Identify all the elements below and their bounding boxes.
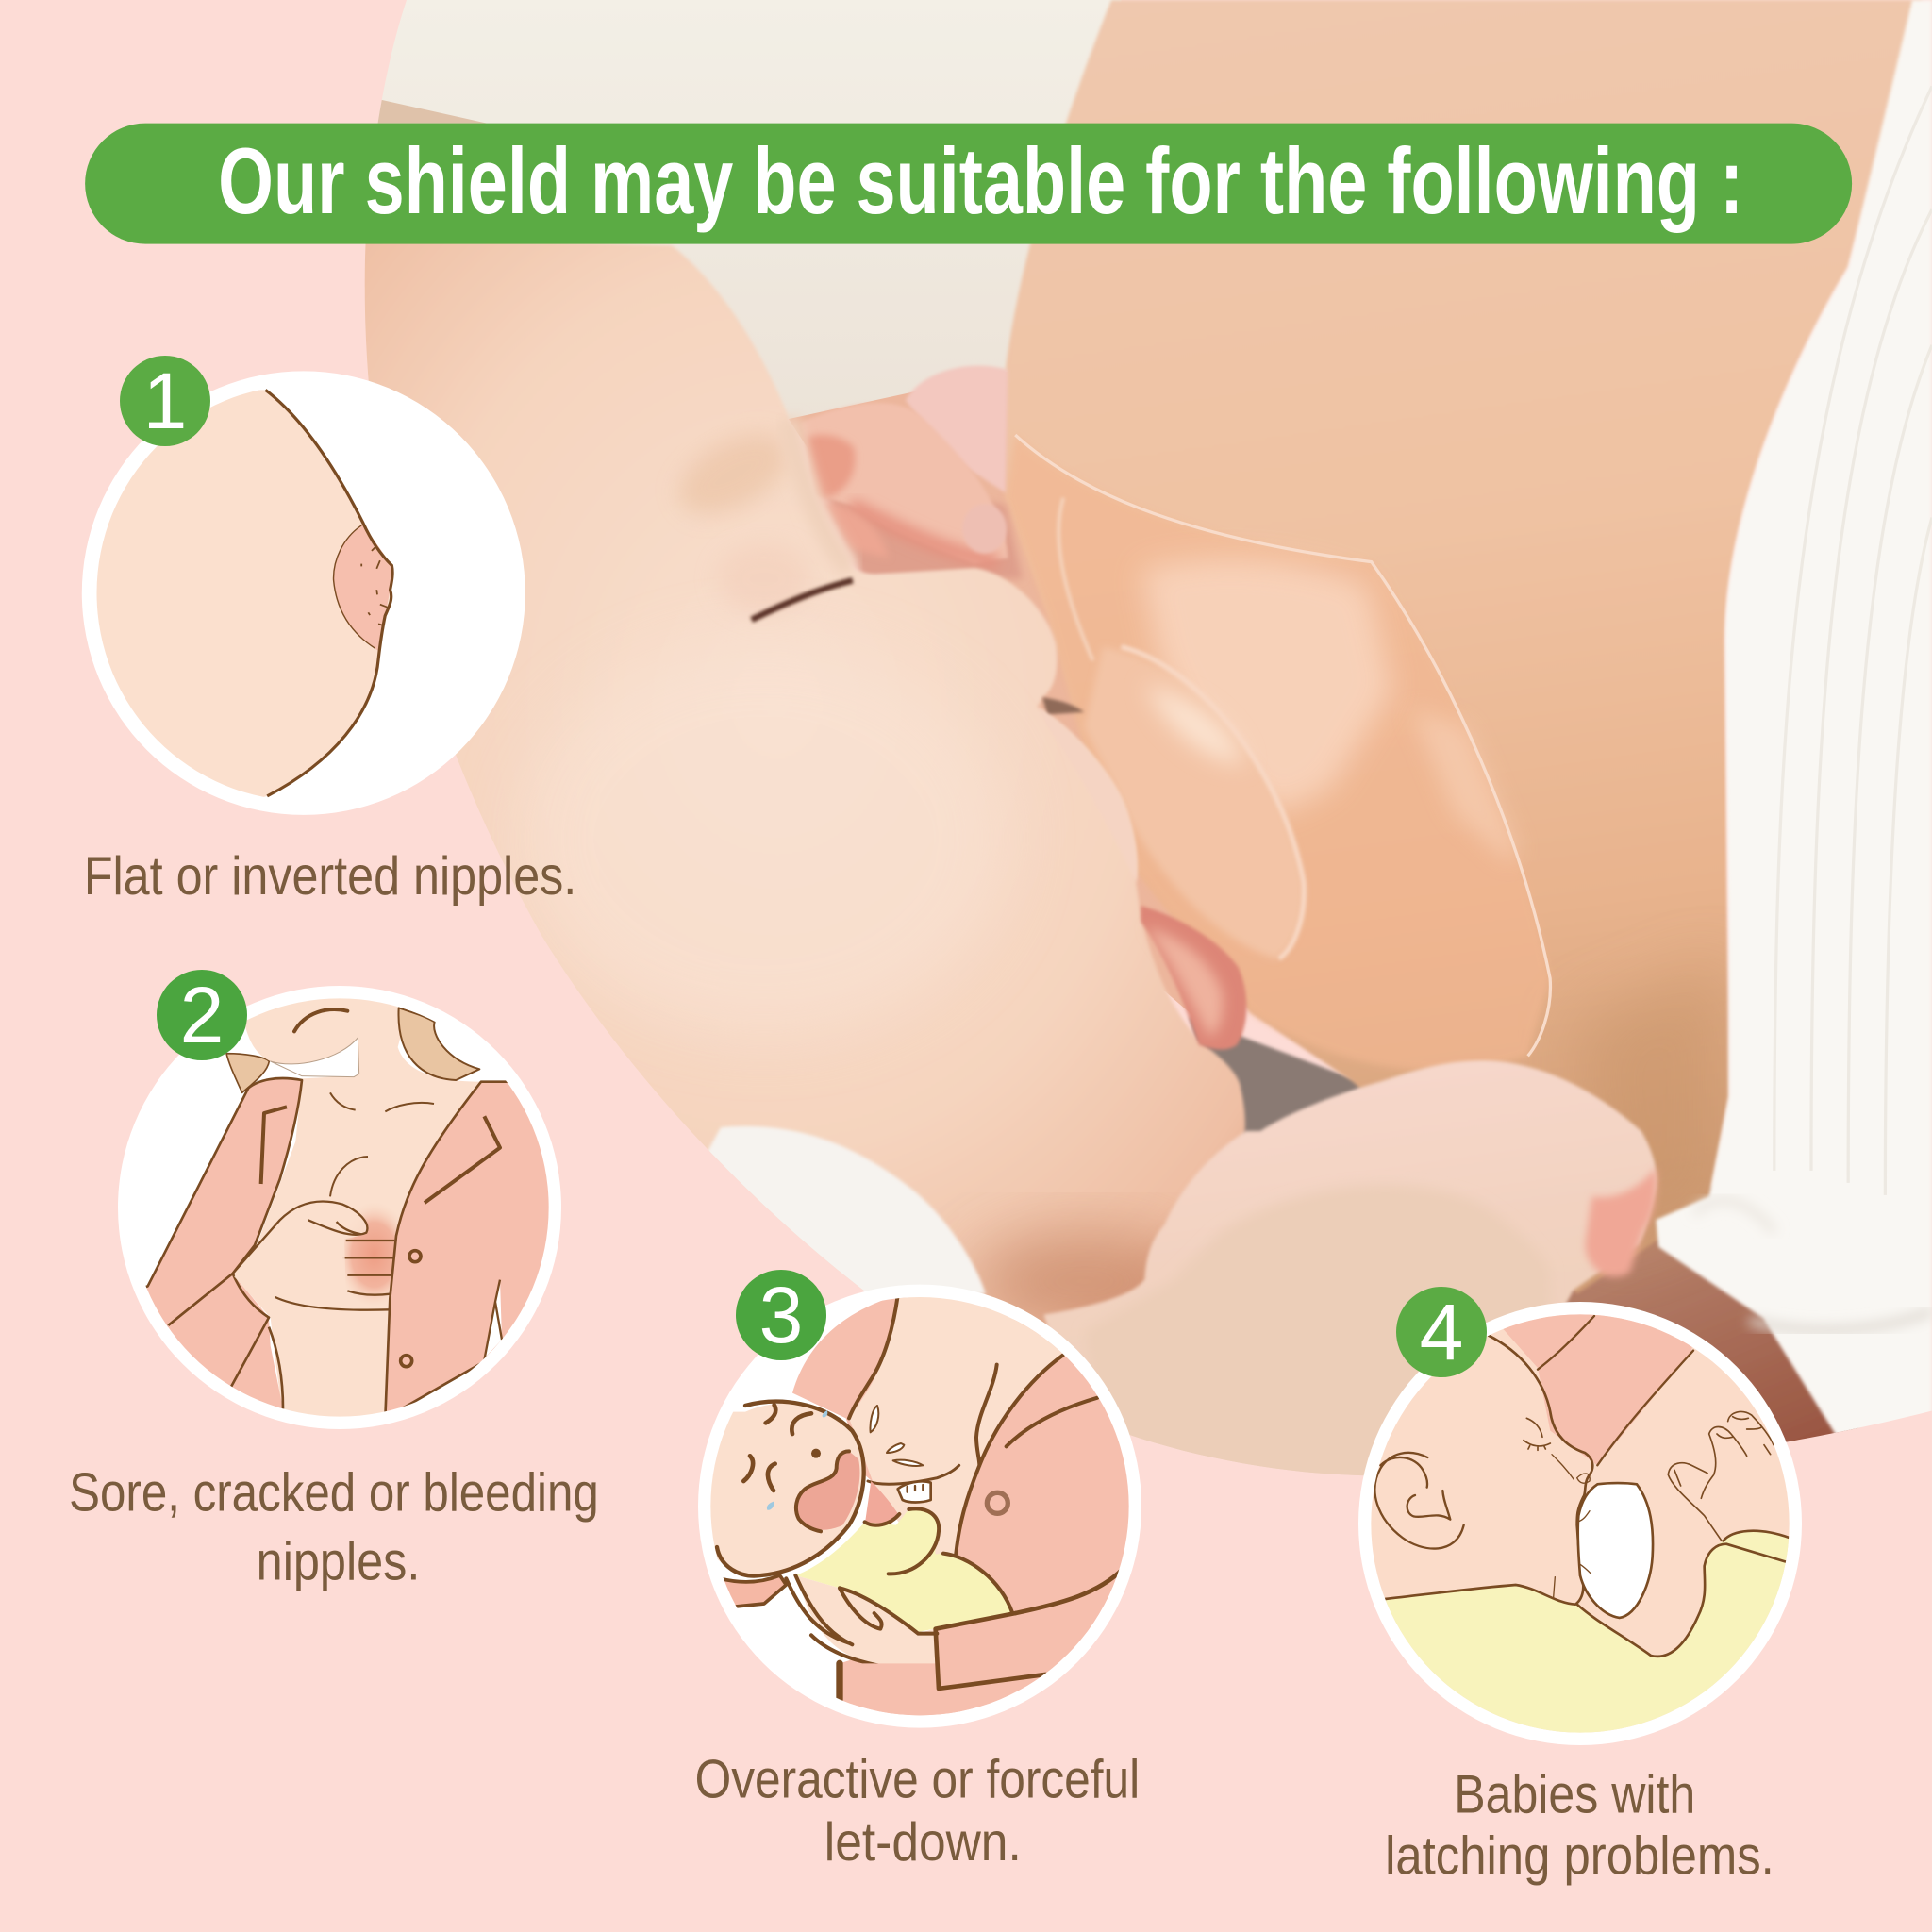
blanket [358, 0, 1122, 419]
shield side band [1417, 713, 1517, 858]
panel 3: overactive or forceful let-down [695, 1270, 1160, 1873]
nose bridge [789, 419, 850, 569]
shield upper lobe [1141, 558, 1392, 813]
caption 4 [1385, 1764, 1774, 1887]
caption 3 [695, 1750, 1140, 1873]
skin shadow near garment [1589, 979, 1729, 1185]
caption 3: let-down. [824, 1812, 1022, 1873]
caption 2: Sore, cracked or bleeding [69, 1462, 599, 1523]
caption 4: Babies with [1454, 1764, 1695, 1824]
badge 3: 3 [759, 1271, 803, 1359]
badge 3 [736, 1270, 826, 1360]
badge 4 [1396, 1287, 1487, 1377]
mother's chest [1006, 0, 1923, 1293]
badge 4: 4 [1420, 1288, 1463, 1376]
baby's face highlight [549, 751, 976, 1008]
icon 2 illustration [113, 986, 566, 1431]
caption 2: nipples. [257, 1531, 420, 1591]
upper lip [1038, 708, 1137, 882]
baby's upper fingers [801, 366, 1023, 579]
panel 1: flat or inverted nipples [57, 340, 576, 907]
garment band shadow [1750, 1311, 1932, 1330]
panel 4: babies with latching problems [1358, 1287, 1805, 1887]
header banner [85, 124, 1852, 244]
baby's eyebrow [677, 432, 785, 517]
badge 1 [120, 356, 210, 446]
caption 3: Overactive or forceful [695, 1750, 1140, 1810]
grey gap beneath baby's lip [1188, 1017, 1360, 1134]
caption 1: Flat or inverted nipples. [84, 846, 576, 907]
eye socket shade [730, 561, 796, 604]
panel 2: sore, cracked or bleeding nipples [69, 970, 599, 1591]
caption 4: latching problems. [1385, 1826, 1774, 1887]
caption 2 [69, 1462, 599, 1591]
baby's lower arm [1043, 1060, 1657, 1503]
baby's neck shadow [974, 1232, 1195, 1331]
baby's head [308, 234, 1245, 1356]
lower lip [1141, 906, 1246, 1050]
brown shadow lower right [1564, 1188, 1858, 1442]
white garment [1656, 0, 1932, 1478]
garment ribbing [1774, 86, 1932, 1195]
white sock [690, 1126, 986, 1312]
nipple dome [1084, 647, 1304, 958]
skin base behind face [789, 392, 1189, 1011]
closed eye [752, 580, 853, 620]
icon 1 illustration [57, 340, 525, 859]
nostril shadow [1042, 697, 1084, 715]
badge 2 [157, 970, 247, 1060]
baby's fist [1585, 1167, 1657, 1276]
breastfeeding photo [308, 0, 1932, 1503]
icon 3 illustration [698, 1285, 1160, 1728]
badge 2: 2 [180, 971, 224, 1059]
skin corner at top left [375, 98, 487, 124]
arm crease [1084, 1185, 1553, 1478]
shield film [1006, 435, 1550, 1071]
badge 1: 1 [143, 357, 187, 445]
icon 4 illustration [1358, 1302, 1805, 1745]
